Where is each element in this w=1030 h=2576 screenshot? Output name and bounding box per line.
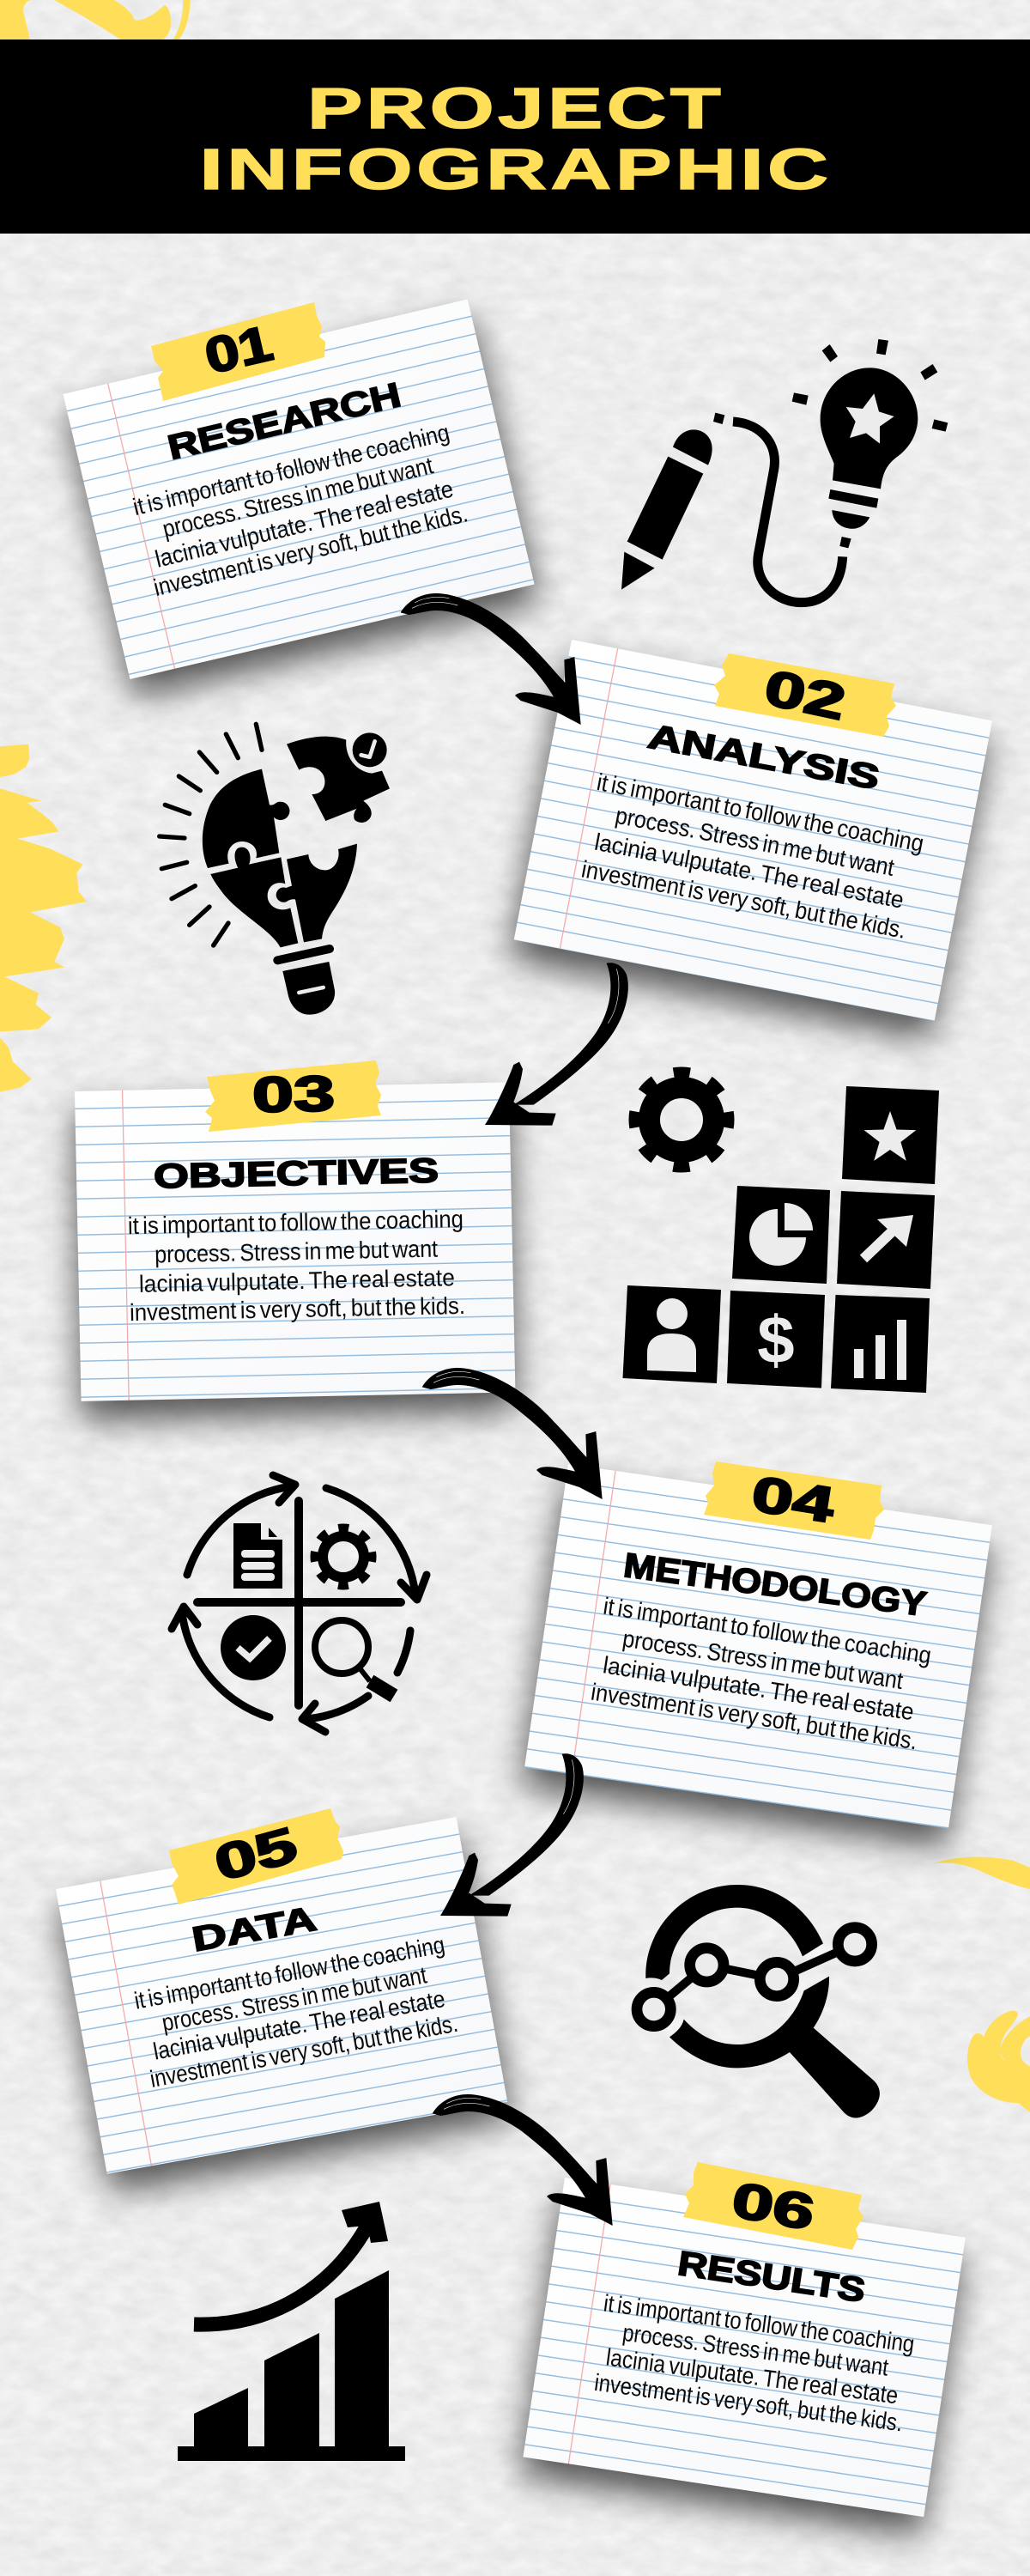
number: 06: 06 bbox=[728, 2172, 819, 2241]
icon: magnifier with line chart bbox=[637, 1885, 880, 2117]
lens upper arc bbox=[645, 1885, 823, 1980]
number: 01: 01 bbox=[200, 315, 277, 385]
number: 05: 05 bbox=[209, 1817, 303, 1892]
block: star bbox=[842, 1086, 939, 1184]
clock bbox=[353, 732, 387, 767]
brush decoration: top left bbox=[0, 0, 191, 39]
body text: data: it is important to follow the coaching bbox=[132, 1931, 447, 2014]
flying puzzle piece bbox=[287, 737, 390, 823]
icon: process cycle bbox=[172, 1475, 427, 1732]
body text: objectives: investment is very soft, but the kids. bbox=[130, 1292, 465, 1326]
tape: 04 bbox=[704, 1461, 884, 1540]
bulb bbox=[821, 368, 918, 529]
body text: analysis: process. Stress in me but want bbox=[613, 802, 897, 881]
chart line bbox=[654, 1944, 855, 2009]
arrow: 02 to 03 bbox=[485, 963, 628, 1126]
body text: data: investment is very soft, but the kids. bbox=[148, 2010, 460, 2093]
body text: objectives: process. Stress in me but want bbox=[154, 1236, 439, 1267]
puzzle piece: upper left bbox=[203, 769, 289, 868]
block: person bbox=[623, 1285, 721, 1383]
body text: analysis: it is important to follow the coaching bbox=[595, 769, 926, 857]
chart nodes bbox=[637, 1928, 872, 2026]
arrow: 05 to 06 bbox=[433, 2094, 613, 2226]
body text: objectives: it is important to follow the coaching bbox=[128, 1206, 464, 1239]
pen bbox=[621, 429, 712, 590]
title: INFOGRAPHIC bbox=[199, 137, 833, 202]
body text: methodology: lacinia vulputate. The real estate bbox=[601, 1651, 916, 1725]
heading: analysis: ANALYSIS bbox=[645, 718, 882, 797]
body text: research: process. Stress in me but want bbox=[160, 452, 436, 543]
heading: objectives: OBJECTIVES bbox=[154, 1152, 439, 1195]
body text: results: investment is very soft, but the kids. bbox=[593, 2369, 905, 2436]
title: PROJECT bbox=[307, 76, 724, 141]
tape: 03 bbox=[205, 1060, 381, 1132]
panel: 02 analysis note bbox=[514, 640, 992, 1021]
arrow: 04 to 05 bbox=[440, 1753, 584, 1917]
body text: results: it is important to follow the coaching bbox=[602, 2289, 916, 2357]
header banner bbox=[0, 39, 1030, 234]
body text: research: lacinia vulputate. The real estate bbox=[153, 475, 456, 573]
body text: data: lacinia vulputate. The real estate bbox=[151, 1985, 447, 2065]
document icon bbox=[233, 1523, 282, 1589]
number: 02: 02 bbox=[760, 659, 851, 731]
check circle bbox=[221, 1615, 286, 1680]
body text: research: it is important to follow the coaching bbox=[130, 419, 452, 520]
icon: pen and light bulb bbox=[621, 339, 948, 603]
number: 03: 03 bbox=[251, 1066, 336, 1123]
panel: 06 results note bbox=[523, 2162, 966, 2517]
number: 04: 04 bbox=[748, 1466, 838, 1534]
bulb base bbox=[277, 949, 330, 960]
block: pie chart bbox=[732, 1186, 830, 1284]
heading: research: RESEARCH bbox=[164, 376, 404, 467]
gear bbox=[634, 1072, 729, 1167]
body text: objectives bbox=[128, 1206, 465, 1326]
block: bar chart bbox=[831, 1295, 930, 1393]
rays bbox=[160, 724, 262, 945]
tape: 02 bbox=[714, 653, 896, 737]
small gear bbox=[314, 1528, 373, 1586]
cable dashes bbox=[713, 413, 851, 548]
brush decoration: left edge bbox=[0, 744, 87, 1092]
cable bbox=[733, 422, 843, 603]
arrow: 03 to 04 bbox=[422, 1368, 603, 1499]
cross dividers bbox=[197, 1501, 401, 1705]
body text: data bbox=[132, 1931, 461, 2093]
title bbox=[199, 76, 833, 202]
block: growth arrow bbox=[837, 1191, 935, 1289]
body text: results: lacinia vulputate. The real estate bbox=[604, 2343, 900, 2409]
panel: 01 research note bbox=[64, 299, 535, 679]
body text: data: process. Stress in me but want bbox=[160, 1961, 429, 2036]
block: dollar: $ bbox=[757, 1302, 795, 1377]
icon: puzzle light bulb bbox=[160, 724, 390, 1015]
body text: methodology: it is important to follow the coaching bbox=[602, 1593, 933, 1669]
body text: methodology bbox=[589, 1593, 933, 1754]
body text: research bbox=[130, 419, 471, 601]
heading: results: RESULTS bbox=[676, 2245, 868, 2310]
block: dollar bbox=[727, 1291, 825, 1388]
puzzle piece: lower right bbox=[276, 844, 357, 942]
panel: 04 methodology note bbox=[524, 1461, 992, 1829]
body text: analysis: lacinia vulputate. The real estate bbox=[592, 829, 906, 914]
rays bbox=[792, 339, 948, 432]
puzzle piece: lower left bbox=[210, 848, 298, 947]
cycle arrows bbox=[172, 1475, 427, 1732]
heading: methodology: METHODOLOGY bbox=[621, 1546, 929, 1624]
lens lower arc and handle bbox=[670, 1977, 880, 2117]
body text: research: investment is very soft, but the kids. bbox=[151, 500, 470, 601]
panel: 05 data note bbox=[56, 1808, 507, 2174]
body text: methodology: investment is very soft, but the kids. bbox=[590, 1679, 919, 1754]
body text: analysis bbox=[579, 769, 926, 944]
tape: 01 bbox=[151, 302, 325, 401]
icon: gear and blocks bbox=[623, 1072, 939, 1393]
icon: growth bar chart bbox=[178, 2202, 405, 2461]
heading: data: DATA bbox=[189, 1900, 319, 1959]
panel: 03 objectives note bbox=[75, 1060, 515, 1401]
body text: objectives: lacinia vulputate. The real estate bbox=[139, 1264, 455, 1297]
body text: analysis: investment is very soft, but the kids. bbox=[579, 855, 908, 944]
body text: results bbox=[591, 2289, 916, 2437]
brush decoration: right edge bbox=[934, 1857, 1030, 2112]
tape: 06 bbox=[683, 2162, 863, 2250]
tape: 05 bbox=[169, 1808, 343, 1905]
magnifier bbox=[315, 1620, 394, 1696]
arrow: 01 to 02 bbox=[401, 593, 581, 725]
body text: methodology: process. Stress in me but want bbox=[621, 1625, 905, 1694]
body text: results: process. Stress in me but want bbox=[621, 2319, 890, 2381]
